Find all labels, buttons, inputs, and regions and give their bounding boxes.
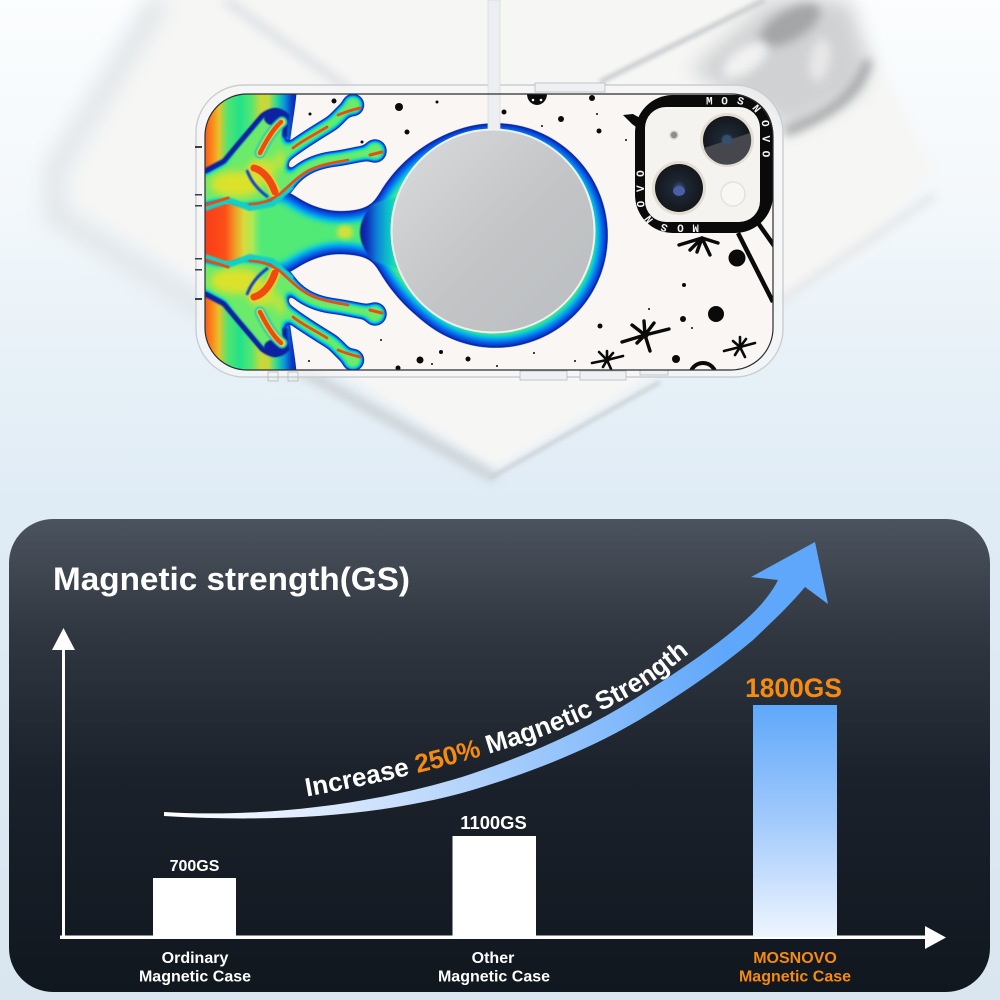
bar: MOSNOVO case: 1800GS xyxy=(745,673,842,703)
lower lens xyxy=(652,161,706,215)
bar: ordinary case: Ordinary xyxy=(162,950,228,967)
clear case frame xyxy=(196,85,783,377)
brand text on bumper xyxy=(636,97,770,232)
brand text on bumper: MOSNOVO xyxy=(636,170,698,232)
charging cable xyxy=(488,0,500,132)
mirrored hand veins xyxy=(205,257,382,357)
panel: magnetic strength chart xyxy=(9,519,990,992)
arrow caption: Increase 250% Magnetic Strength xyxy=(305,644,688,796)
bar: MOSNOVO case: Magnetic Case xyxy=(739,968,851,986)
trunk hot zone xyxy=(206,204,260,261)
blurred background phone cases xyxy=(55,0,935,478)
ring junction crescent xyxy=(360,195,402,270)
y axis xyxy=(52,628,75,938)
bar: MOSNOVO case: MOSNOVO xyxy=(753,950,837,967)
magnetic field heat map xyxy=(206,94,608,370)
flash xyxy=(670,131,678,139)
camera plate xyxy=(645,107,760,222)
phone case xyxy=(195,0,784,382)
upper lens xyxy=(700,113,754,167)
screen outline xyxy=(205,94,773,370)
space print: stars xyxy=(592,238,755,369)
hand veins xyxy=(205,108,382,208)
magnetic charger disc xyxy=(392,130,594,332)
case print surface xyxy=(205,94,773,370)
case buttons xyxy=(268,83,668,381)
bar: ordinary case: 700GS xyxy=(170,858,220,875)
bar: ordinary case xyxy=(139,858,251,986)
space print: planets and rocket xyxy=(527,94,775,389)
side tick marks xyxy=(195,146,202,300)
space print: dots xyxy=(308,95,746,370)
bar: other case xyxy=(438,812,550,986)
x axis xyxy=(60,926,946,949)
bar: other case: Other xyxy=(472,950,514,967)
hand outline field xyxy=(206,94,387,206)
lower hand and tendrils xyxy=(190,256,387,372)
brand text on bumper: MOSNOVO xyxy=(706,97,770,157)
upper hand and tendrils xyxy=(190,94,387,209)
heading: Magnetic strength(GS) xyxy=(53,561,410,597)
bar: other case: 1100GS xyxy=(460,812,527,833)
microphone window xyxy=(721,182,745,206)
trunk hot spot xyxy=(337,225,353,239)
bottom colour band xyxy=(206,294,296,370)
camera bumper xyxy=(635,95,773,233)
mirrored hand field xyxy=(206,258,387,370)
top colour band xyxy=(206,94,296,172)
growth arrow xyxy=(164,542,828,818)
bar: MOSNOVO case xyxy=(739,673,851,986)
trunk and ring field xyxy=(180,123,608,348)
bar: ordinary case: Magnetic Case xyxy=(139,968,251,986)
bar: other case: Magnetic Case xyxy=(438,968,550,986)
